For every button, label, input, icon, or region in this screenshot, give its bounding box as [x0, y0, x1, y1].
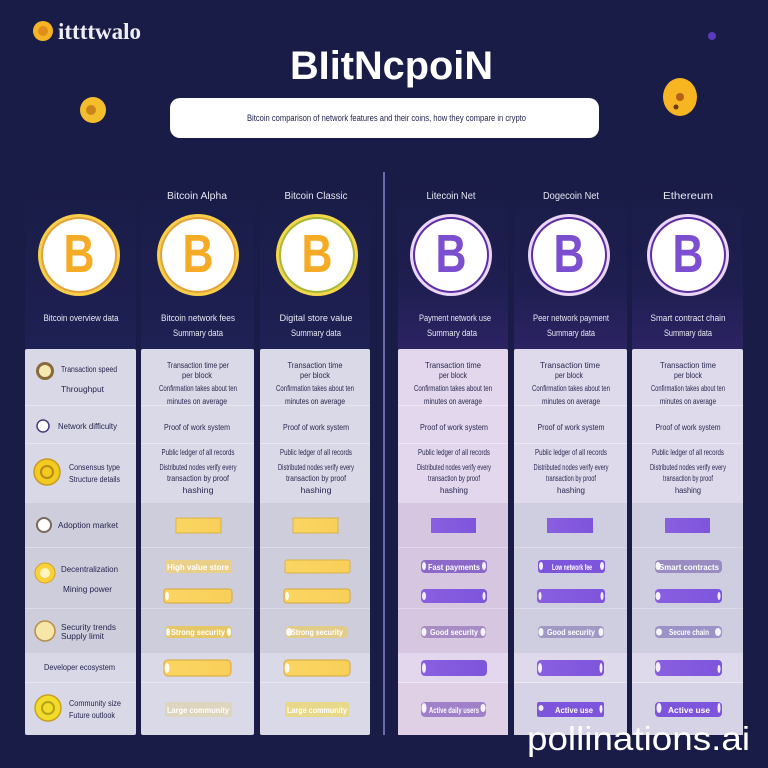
table panel: purple column 3: minutes on average: [660, 397, 716, 406]
table panel: gold column 2: Public ledger of all records: [280, 448, 352, 457]
table panel: purple column 2: Distributed nodes verify every: [534, 463, 608, 472]
table panel: gold column 2: Strong security: [291, 628, 343, 637]
coin: gold 1: [38, 214, 120, 296]
row 6 label: Security trends: [61, 623, 116, 632]
row dividers: [25, 405, 743, 683]
centre divider: [383, 172, 385, 735]
row 2 label: Network difficulty: [58, 422, 117, 431]
table panel: gold column 2: Proof of work system: [283, 423, 349, 432]
table panel: purple column 1: hashing: [440, 486, 468, 495]
table panel: gold column 1: Proof of work system: [164, 423, 230, 432]
decorative gold coin right: [663, 78, 697, 116]
table panel: gold column 2: per block: [300, 371, 331, 380]
column headings: Bitcoin Classic: [284, 191, 348, 202]
coin captions: Peer network payment: [533, 313, 609, 323]
coin: gold 2: B: [182, 224, 214, 284]
column headings: Bitcoin Alpha: [167, 191, 227, 202]
coin captions: Summary data: [547, 328, 595, 338]
table panel: purple column 3: Active use: [668, 706, 711, 715]
row 3 label: [34, 459, 120, 485]
table panel: purple column 1: per block: [439, 371, 468, 380]
coin captions: Bitcoin overview data: [44, 313, 118, 323]
table panel: feature labels: [25, 349, 136, 735]
coin: purple 1: [410, 214, 492, 296]
column headings: Ethereum: [663, 191, 713, 202]
coin: gold 1: B: [64, 224, 94, 284]
gaps between panels: [136, 349, 632, 735]
table panel: gold column 1: Distributed nodes verify every: [160, 463, 236, 472]
subtitle pill: [170, 98, 599, 138]
column headings: Dogecoin Net: [543, 191, 599, 202]
table panel: gold column 1: Confirmation takes about ten: [159, 384, 237, 393]
decorative purple dot: [708, 32, 716, 40]
row 1 label: [36, 362, 117, 394]
row 6 label: Supply limit: [61, 632, 105, 641]
table panel: purple column 3: hashing: [675, 486, 701, 495]
subtitle pill: Bitcoin comparison of network features and their coins, how they compare in crypto: [247, 113, 526, 123]
row 5 label: [35, 563, 118, 594]
row 6 label: [35, 621, 116, 641]
coin captions: Summary data: [173, 328, 223, 338]
column headings: Litecoin Net: [426, 191, 476, 202]
coin captions: Digital store value: [280, 313, 352, 323]
table panel: purple column 2: per block: [555, 371, 584, 380]
row 8 label: Future outlook: [69, 711, 116, 720]
row 8 label: [35, 695, 121, 721]
table panel: gold column 2: Distributed nodes verify every: [278, 463, 354, 472]
table panel: purple column 1: Transaction time: [425, 361, 482, 370]
table panel: purple column 3: Transaction time: [660, 361, 717, 370]
table panel: gold column 2: [260, 349, 370, 735]
table panel: purple column 2: minutes on average: [542, 397, 600, 406]
coin: purple 3: B: [672, 224, 704, 284]
row 4 label: [37, 518, 119, 532]
table panel: purple column 3: Proof of work system: [656, 423, 721, 432]
table panel: purple column 1: Active daily users: [429, 706, 479, 715]
coin: gold 3: B: [302, 224, 332, 284]
coin: purple 2: B: [554, 224, 584, 284]
table panel: gold column 1: Public ledger of all records: [162, 448, 234, 457]
row 1 label: Throughput: [61, 385, 105, 394]
table panel: purple column 3: transaction by proof: [663, 474, 714, 483]
table panel: purple column 1: [398, 349, 508, 735]
table panel: purple column 2: Active use: [555, 706, 594, 715]
coin: gold 3: [276, 214, 358, 296]
table panel: purple column 1: Good security: [430, 628, 478, 637]
table panel: purple column 1: Confirmation takes about ten: [414, 384, 492, 393]
table panel: gold column 1: minutes on average: [167, 397, 227, 406]
row 3 label: Consensus type: [69, 463, 120, 472]
table panel: gold column 1: Strong security: [171, 628, 225, 637]
table panel: purple column 2: hashing: [557, 486, 585, 495]
row 8 label: Community size: [69, 699, 121, 708]
coin captions: Summary data: [291, 328, 341, 338]
row 2 label: [37, 420, 117, 432]
coin: purple 2: [528, 214, 610, 296]
logo: ittttwalo: [58, 19, 141, 44]
table panel: gold column 1: per block: [182, 371, 213, 380]
table panel: gold column 1: [141, 349, 254, 735]
table panel: gold column 2: hashing: [300, 486, 332, 495]
row 3 label: Structure details: [69, 475, 120, 484]
table panel: purple column 3: Smart contracts: [659, 563, 720, 572]
table panel: purple column 1: Distributed nodes verify every: [417, 463, 491, 472]
coin: gold 2: [157, 214, 239, 296]
table panel: purple column 3: [632, 349, 743, 735]
table panel: gold column 2: Large community: [287, 706, 347, 715]
row 5 label: Mining power: [63, 585, 112, 594]
row 7 label: Developer ecosystem: [44, 663, 115, 672]
table panel: purple column 2: [514, 349, 627, 735]
table panel: purple column 3: per block: [674, 371, 703, 380]
table panel: gold column 1: Transaction time per: [167, 361, 229, 370]
coin: purple 3: [647, 214, 729, 296]
table panel: gold column 2: Transaction time: [288, 361, 343, 370]
row 1 label: Transaction speed: [61, 365, 117, 374]
table panel: gold column 1: transaction by proof: [167, 474, 230, 483]
coin captions: Payment network use: [419, 313, 491, 323]
row 4 label: Adoption market: [58, 521, 119, 530]
watermark: pollinations.ai: [527, 720, 750, 757]
table panel: purple column 3: Public ledger of all records: [652, 448, 724, 457]
table panel: purple column 2: Public ledger of all records: [535, 448, 607, 457]
table panel: purple column 1: Proof of work system: [420, 423, 488, 432]
table panel: purple column 2: transaction by proof: [546, 474, 597, 483]
column headings: [167, 191, 713, 202]
table panel: purple column 1: transaction by proof: [428, 474, 481, 483]
coin captions: Bitcoin network fees: [161, 313, 235, 323]
column backdrop panels: [25, 180, 743, 350]
coin captions: Summary data: [664, 328, 712, 338]
coin captions: Summary data: [427, 328, 477, 338]
decorative gold coin left: [80, 97, 106, 123]
coin captions: [44, 313, 726, 338]
table panel: purple column 1: Public ledger of all records: [418, 448, 490, 457]
title: BIitNcpoiN: [290, 44, 493, 88]
table panel: purple column 2: Low network fee: [552, 563, 592, 572]
table panel: gold column 2: minutes on average: [285, 397, 345, 406]
coin captions: Smart contract chain: [650, 313, 726, 323]
table panel: purple column 1: minutes on average: [424, 397, 482, 406]
table panel: gold column 1: High value store: [167, 563, 230, 572]
table panel: purple column 2: Transaction time: [540, 361, 601, 370]
table panel: gold column 1: Large community: [167, 706, 230, 715]
table panel: purple column 2: Confirmation takes about ten: [532, 384, 610, 393]
row 5 label: Decentralization: [61, 565, 118, 574]
table panel: purple column 1: Fast payments: [428, 563, 481, 572]
table panel: gold column 2: Confirmation takes about ten: [276, 384, 354, 393]
table panel: purple column 2: Proof of work system: [538, 423, 605, 432]
table panel: gold column 2: transaction by proof: [286, 474, 347, 483]
table panel: purple column 2: Good security: [547, 628, 595, 637]
table panel: purple column 3: Secure chain: [669, 628, 709, 637]
coin: purple 1: B: [436, 224, 466, 284]
table panel: gold column 1: hashing: [182, 486, 214, 495]
table panel: purple column 3: Confirmation takes about ten: [651, 384, 725, 393]
table panel: purple column 3: Distributed nodes verify every: [650, 463, 726, 472]
